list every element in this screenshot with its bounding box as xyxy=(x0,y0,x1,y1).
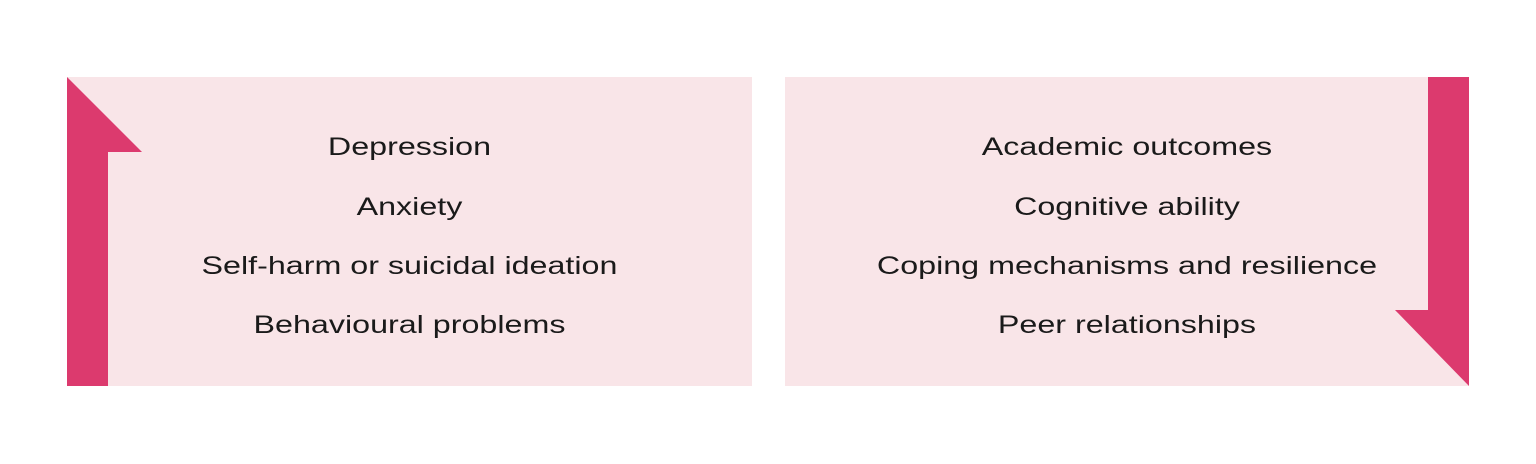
arrow: up xyxy=(67,77,142,386)
text: cognitive: Cognitive ability xyxy=(1014,193,1240,221)
text: behavioural: Behavioural problems xyxy=(254,311,565,339)
text: coping: Coping mechanisms and resilience xyxy=(877,252,1377,280)
arrow: down xyxy=(1395,77,1469,386)
panel: right xyxy=(785,77,1469,386)
text: anxiety: Anxiety xyxy=(357,193,462,221)
text: academic: Academic outcomes xyxy=(982,133,1272,161)
panel: left xyxy=(67,77,752,386)
text: peer: Peer relationships xyxy=(998,311,1256,339)
text: self-harm: Self-harm or suicidal ideation xyxy=(202,252,617,280)
text: depression: Depression xyxy=(328,133,491,161)
